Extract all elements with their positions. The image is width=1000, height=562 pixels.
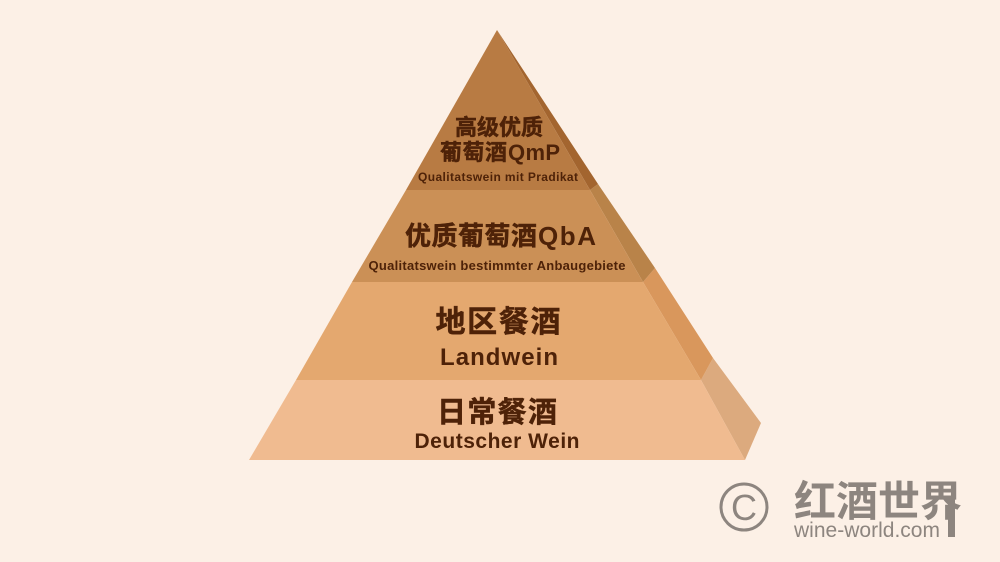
tier 3: Landwein	[296, 268, 713, 380]
tier 1: QmP: 葡萄酒	[440, 140, 507, 165]
tier 4: Deutscher Wein	[249, 358, 761, 460]
tier 2: QbA: QbA	[538, 221, 596, 251]
tier 3: Landwein: Landwein	[440, 344, 558, 371]
tier 3: Landwein: 地区餐酒	[436, 306, 560, 339]
tier 2: QbA: 优质葡萄酒	[405, 221, 537, 251]
tier 2: QbA: Qualitatswein bestimmter Anbaugebiete	[368, 258, 626, 273]
icon: copyright symbol: C	[731, 487, 757, 528]
tier 4: Deutscher Wein: 日常餐酒	[437, 396, 557, 429]
tier 2: QbA	[352, 184, 655, 282]
wine quality pyramid	[249, 30, 761, 460]
tier 1: QmP: 高级优质	[455, 115, 543, 140]
logo wordmark: 红酒世界	[794, 478, 962, 525]
watermark logo	[721, 478, 962, 542]
tier 4: Deutscher Wein: Deutscher Wein	[414, 430, 580, 453]
icon: copyright symbol	[721, 484, 767, 530]
tier 1: QmP: QmP	[508, 140, 560, 165]
tier 1: QmP: Qualitatswein mit Pradikat	[418, 170, 578, 184]
logo leg stroke	[948, 498, 955, 537]
tier 1: QmP	[406, 30, 598, 190]
logo url: wine-world.com	[793, 519, 940, 542]
